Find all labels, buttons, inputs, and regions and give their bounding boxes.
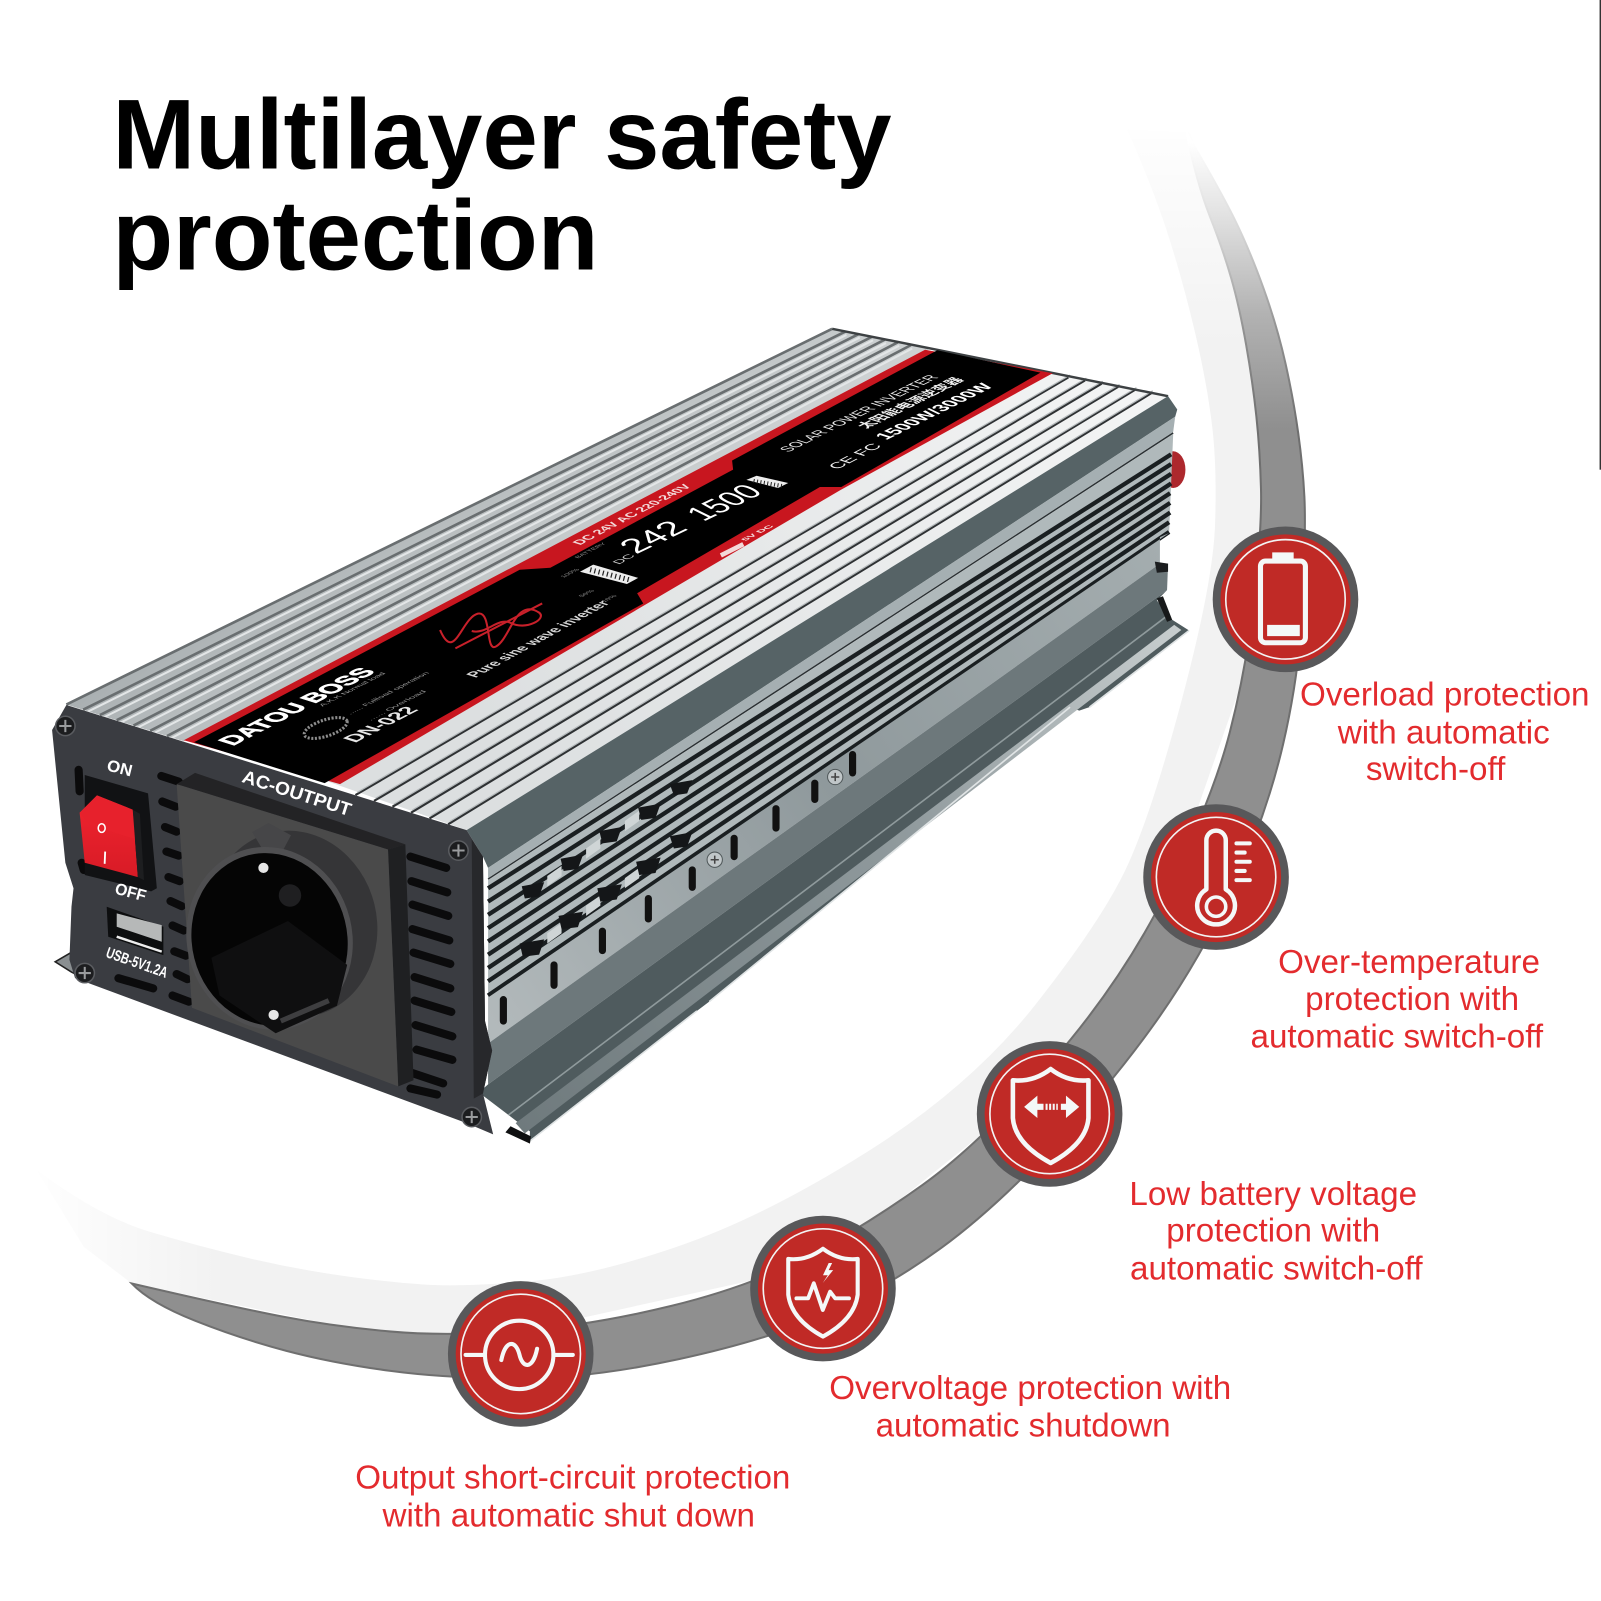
USB label: USB-5V1.2A	[104, 944, 170, 982]
icon: shield with pulse	[788, 1249, 858, 1337]
AC-OUTPUT label: AC-OUTPUT	[240, 766, 355, 820]
flange end pieces	[1155, 562, 1168, 573]
model number: DN-022	[338, 705, 424, 744]
left mounting flange tip	[55, 948, 84, 978]
top face with cooling fins	[66, 329, 1168, 830]
caption: low battery voltage	[1129, 1176, 1423, 1287]
red terminal knob	[1161, 451, 1185, 488]
band: black	[194, 350, 1040, 783]
caption: low battery voltage: protection with	[1166, 1213, 1380, 1250]
sub-label: Pure sine wave inverter	[463, 599, 614, 679]
display: percent marks left: 10%	[600, 594, 619, 603]
side: louvre highlights	[547, 811, 639, 943]
caption: overvoltage: automatic shutdown	[876, 1408, 1171, 1445]
badge: output short-circuit	[448, 1281, 594, 1427]
display: wattage: 1500	[677, 480, 770, 525]
display: percent marks left: 50%	[578, 589, 597, 598]
status legend: ...... Fullload operation	[344, 671, 431, 715]
brand name: DATOU BOSS	[213, 665, 382, 748]
title: protection	[112, 181, 598, 292]
side: louvre cut-outs	[520, 780, 692, 957]
side: bevel	[467, 396, 1177, 868]
icon: battery	[1260, 552, 1305, 643]
side: mounting flange	[479, 590, 1189, 1141]
icon: thermometer	[1197, 831, 1250, 924]
caption: overload: Overload protection	[1300, 677, 1590, 714]
slots between switch and socket	[79, 770, 189, 1002]
fingerprint mark	[302, 713, 350, 743]
label band	[184, 350, 1053, 784]
side: ventilation slots	[503, 755, 853, 1021]
product: power inverter	[52, 329, 1189, 1144]
certification marks: CE FC	[825, 442, 886, 471]
sine wave mark	[440, 603, 542, 648]
display: DC voltage: 242	[610, 516, 696, 557]
chinese product name: 太阳能电源逆变器	[852, 375, 969, 430]
status legend	[317, 671, 431, 721]
OFF label: OFF	[113, 880, 148, 905]
badge: low battery voltage	[977, 1041, 1122, 1187]
display: percent marks left: 100%	[559, 568, 582, 578]
curved arc backdrop	[26, 112, 1305, 1378]
power rating: 1500W/3000W	[871, 381, 999, 441]
arc: light band	[37, 130, 1271, 1348]
side face	[467, 396, 1189, 1144]
plate screws	[56, 716, 481, 1127]
badge: overvoltage	[750, 1216, 896, 1361]
caption: low battery voltage: Low battery voltage	[1129, 1176, 1417, 1213]
status legend: ...... Overload	[365, 690, 428, 721]
caption: over-temperature: protection with	[1305, 981, 1519, 1018]
caption: overload	[1300, 677, 1590, 788]
usb indicator	[720, 542, 744, 557]
side: fin zone	[488, 434, 1173, 998]
rocker switch	[80, 775, 157, 891]
caption: output short-circuit	[355, 1460, 790, 1534]
caption: low battery voltage: automatic switch-off	[1130, 1250, 1423, 1287]
display: battery gauge right	[746, 476, 788, 488]
ON label: ON	[105, 757, 134, 780]
usb port	[107, 907, 163, 955]
display: battery gauge left	[580, 565, 638, 584]
display: percent marks left: BATTERY	[574, 542, 609, 559]
title	[112, 79, 892, 292]
product name: SOLAR POWER INVERTER	[777, 374, 943, 453]
status legend: A.K.K Normal load	[317, 671, 388, 707]
side: light strip	[488, 417, 1175, 878]
title: Multilayer safety	[112, 79, 892, 190]
side: lower band	[488, 564, 1168, 1084]
caption: overload: switch-off	[1366, 751, 1506, 788]
slots right of socket	[410, 857, 452, 1095]
socket	[167, 773, 414, 1086]
voltage label: DC 24V AC 220-240V	[569, 483, 695, 546]
icon: shield with arrows	[1013, 1069, 1088, 1163]
display: DC tag: DC	[609, 553, 639, 565]
front plate	[52, 705, 493, 1134]
side: slotted panel	[488, 533, 1169, 1044]
side: small screws	[707, 769, 843, 867]
arc: grey band	[132, 133, 1305, 1378]
caption: over-temperature: automatic switch-off	[1251, 1019, 1544, 1056]
badge: overload	[1213, 527, 1358, 672]
right edge line	[1600, 0, 1601, 470]
band: red	[184, 350, 1053, 784]
icon: AC sine source	[466, 1321, 573, 1389]
caption: overvoltage: Overvoltage protection with	[829, 1370, 1231, 1407]
caption: overload: with automatic	[1337, 714, 1550, 751]
caption: output short-circuit: Output short-circuit protection	[355, 1460, 790, 1497]
caption: overvoltage	[829, 1370, 1231, 1445]
badge: over-temperature	[1143, 804, 1289, 950]
5V label: 5V DC	[739, 524, 776, 542]
caption: over-temperature: Over-temperature	[1278, 944, 1540, 981]
caption: over-temperature	[1251, 944, 1544, 1056]
caption: output short-circuit: with automatic shut down	[381, 1497, 755, 1534]
display: percent marks left	[559, 542, 619, 603]
